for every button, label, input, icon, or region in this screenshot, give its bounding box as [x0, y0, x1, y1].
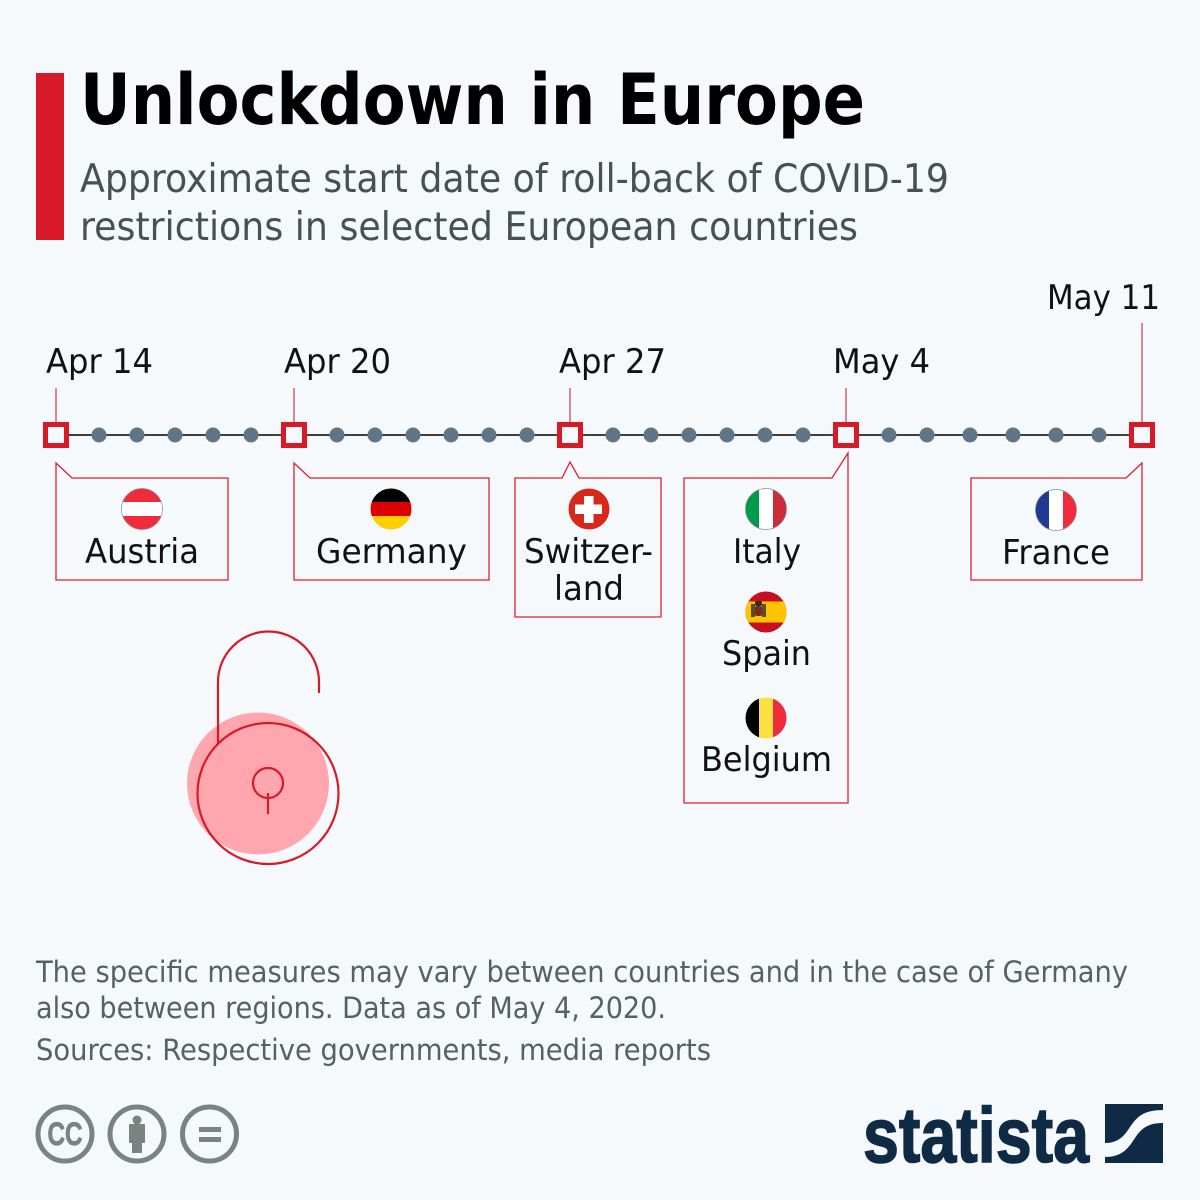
- callout: Italy, Spain, Belgium: Spain: [722, 634, 811, 674]
- subtitle: Approximate start date of roll-back of COVID-19: [80, 157, 949, 202]
- icon: creative commons: CC: [48, 1116, 82, 1152]
- icon: creative commons: [38, 1107, 92, 1161]
- icon: open padlock: [187, 632, 338, 864]
- callout: Switzerland: [515, 462, 661, 617]
- flag: Belgium: [745, 697, 787, 739]
- subtitle: [80, 157, 949, 250]
- footnote: also between regions. Data as of May 4, 2020.: [36, 991, 666, 1025]
- callout: France: France: [1002, 533, 1110, 573]
- icon: no derivatives: [182, 1107, 236, 1161]
- date labels: May 11: [1047, 278, 1160, 318]
- date labels: [46, 278, 1160, 382]
- flag: Austria: [121, 488, 163, 530]
- footnote: The specific measures may vary between countries and in the case of Germany: [35, 955, 1128, 989]
- date labels: May 4: [833, 342, 930, 382]
- flag: Spain: [745, 591, 787, 633]
- date labels: Apr 27: [559, 342, 666, 382]
- date labels: Apr 20: [284, 342, 391, 382]
- callout: Switzerland: Switzer-: [524, 532, 653, 572]
- callout: Austria: Austria: [85, 532, 199, 572]
- flag: Italy: [745, 488, 787, 530]
- callout: Switzerland: land: [554, 569, 624, 609]
- footnote: [35, 955, 1128, 1025]
- callout: France: [971, 463, 1142, 580]
- subtitle: restrictions in selected European countries: [80, 205, 858, 250]
- red title bar: [36, 73, 64, 240]
- flag: France: [1035, 489, 1077, 531]
- title: Unlockdown in Europe: [80, 59, 865, 141]
- icon: attribution: [110, 1107, 164, 1161]
- callout: Italy, Spain, Belgium: Belgium: [701, 740, 832, 780]
- flag: Switzerland: [568, 488, 610, 530]
- callout: Germany: Germany: [316, 532, 467, 572]
- timeline: [46, 323, 1152, 446]
- logo: statista mark: [1105, 1104, 1163, 1163]
- date labels: Apr 14: [46, 342, 153, 382]
- callout: Germany: [294, 463, 489, 580]
- flag: Germany: [370, 488, 412, 530]
- logo: statista wordmark: statista: [863, 1091, 1090, 1179]
- callout: Austria: [56, 463, 228, 580]
- callout: Italy, Spain, Belgium: [684, 453, 848, 803]
- callout: Italy, Spain, Belgium: Italy: [733, 532, 801, 572]
- sources: Sources: Respective governments, media reports: [36, 1033, 711, 1067]
